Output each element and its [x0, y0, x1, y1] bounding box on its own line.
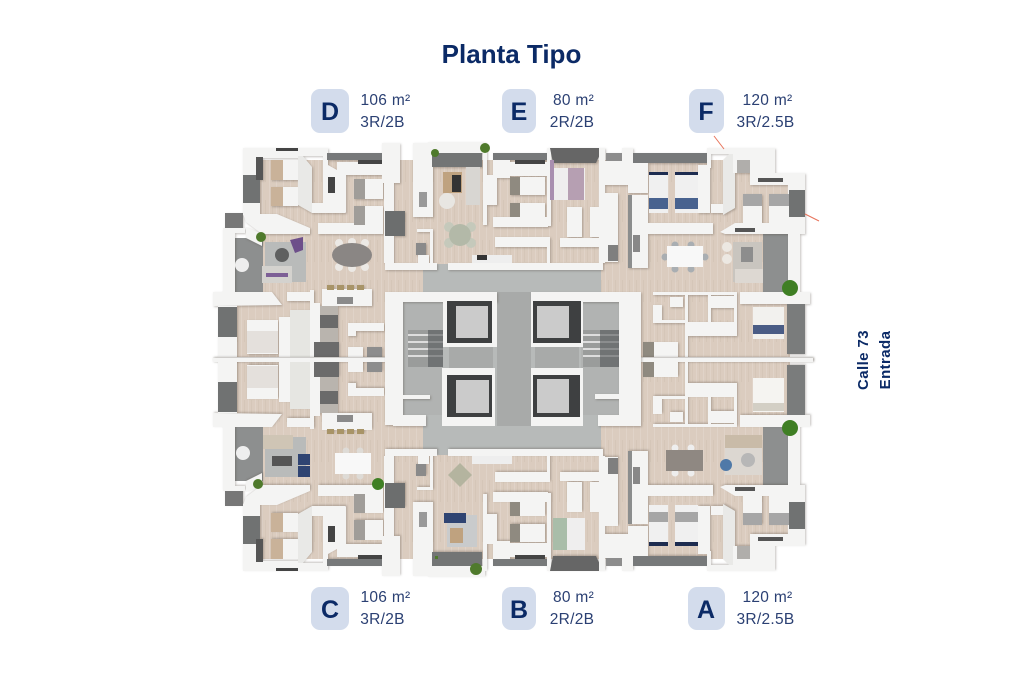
street label [855, 330, 894, 390]
elevator bottom right [531, 368, 583, 426]
unit E label: 80 m² [553, 92, 594, 109]
unit D label: 106 m² [360, 92, 411, 109]
unit A label: 120 m² [742, 589, 793, 606]
unit D label: D [321, 98, 339, 126]
red marker top [714, 136, 724, 149]
unit A label [688, 587, 795, 630]
furniture unit C [236, 435, 384, 490]
unit D label: 3R/2B [360, 114, 405, 131]
unit E label [502, 89, 594, 133]
core walls [385, 292, 641, 426]
unit C label: 106 m² [360, 589, 411, 606]
furniture unit B [435, 456, 585, 575]
unit E label: E [511, 98, 527, 126]
walls and shared furniture, top half [213, 142, 813, 361]
elevator top right [531, 292, 583, 347]
stairwell right [581, 302, 627, 415]
furniture unit A [649, 378, 798, 546]
furniture unit D [235, 232, 372, 283]
unit B label: 2R/2B [550, 611, 594, 628]
lift hall [449, 347, 579, 368]
furniture unit F [649, 172, 798, 339]
street label: Calle 73 [855, 330, 872, 390]
walls and shared furniture, bottom half mirrored [213, 358, 813, 577]
unit C label: C [321, 596, 339, 624]
central lobby [497, 292, 531, 426]
unit B label: 80 m² [553, 589, 594, 606]
unit C label: 3R/2B [360, 611, 405, 628]
stairwell left [403, 302, 443, 415]
unit D label [311, 89, 411, 133]
terraces [235, 233, 788, 486]
furniture unit E [431, 143, 585, 263]
unit F label: 3R/2.5B [736, 114, 795, 131]
unit A label: A [697, 596, 715, 624]
street label: Entrada [877, 330, 894, 389]
elevator bottom left [442, 368, 495, 426]
unit F label: 120 m² [742, 92, 793, 109]
unit F label [689, 89, 795, 133]
unit C label [311, 587, 411, 630]
unit E label: 2R/2B [550, 114, 594, 131]
red marker right [805, 214, 819, 221]
title: Planta Tipo [442, 39, 581, 69]
unit B label [502, 587, 594, 630]
unit F label: F [698, 98, 714, 126]
lobby floor [423, 264, 601, 455]
elevator top left [443, 292, 497, 347]
unit B label: B [510, 596, 528, 624]
wood floor [237, 160, 790, 559]
building core [385, 292, 641, 426]
unit A label: 3R/2.5B [736, 611, 795, 628]
floor plan [213, 142, 813, 577]
